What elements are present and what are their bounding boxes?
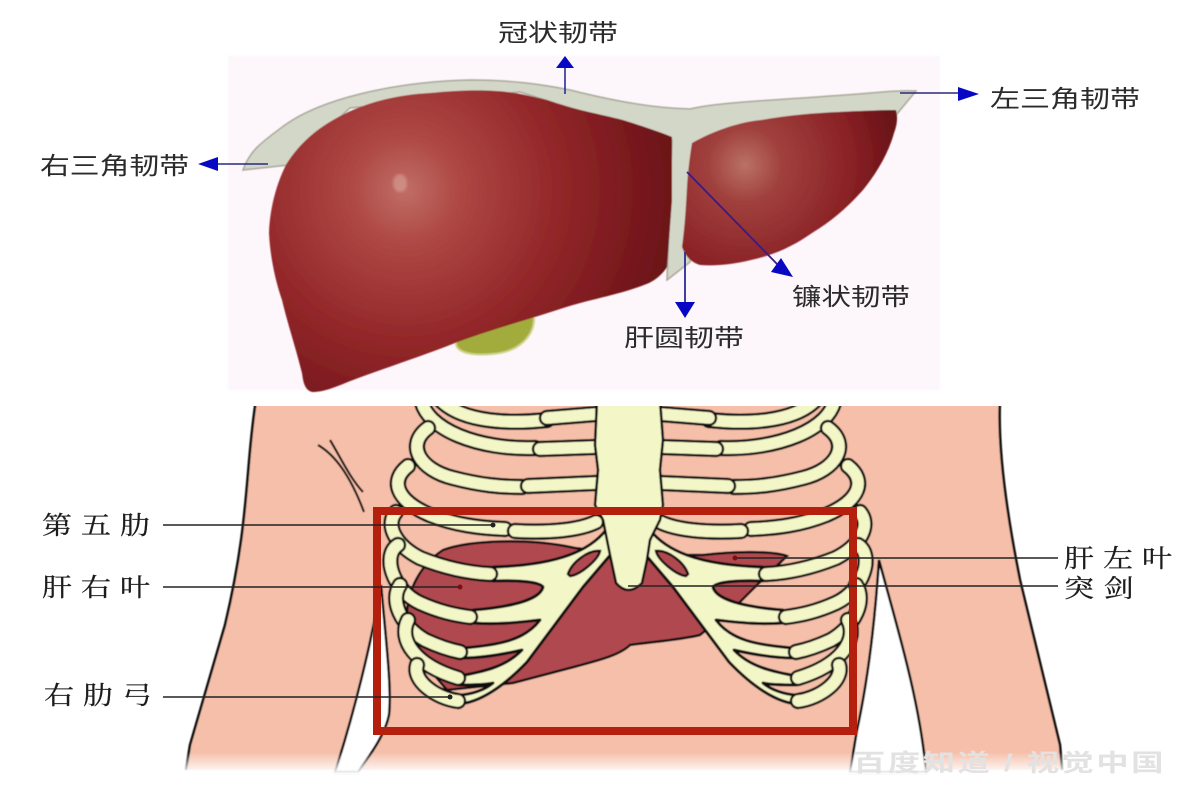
leader: fifth rib — [163, 522, 496, 528]
label: fifth rib: 第五肋 — [42, 511, 150, 539]
arrow: left triangular ligament — [900, 87, 979, 101]
illustration: torso with rib cage — [186, 396, 1062, 772]
arrow: right triangular ligament — [198, 157, 268, 171]
liver highlight — [393, 174, 407, 192]
leader: xiphoid process — [628, 585, 1058, 587]
torso — [186, 400, 1062, 770]
arrow: falciform ligament — [687, 172, 793, 277]
armpit creases — [318, 440, 364, 512]
illustration: liver anterior view — [243, 80, 916, 392]
label: left lobe of liver: 肝左叶 — [1064, 544, 1172, 572]
liver in abdomen — [407, 541, 787, 690]
ligament membrane — [243, 80, 916, 280]
left lobe — [682, 110, 897, 265]
left arm gap — [335, 585, 390, 772]
ribs: body right — [644, 396, 866, 704]
ribs: body left — [390, 396, 612, 704]
right lobe — [269, 90, 672, 392]
sternum and xiphoid — [595, 400, 663, 590]
fade at bottom of torso — [170, 752, 1080, 774]
arrow: coronary ligament — [556, 56, 574, 94]
label: xiphoid process: 突剑 — [1064, 574, 1134, 602]
panel: liver illustration background — [228, 56, 940, 390]
leader: right costal arch — [163, 694, 452, 700]
highlight box — [377, 511, 853, 731]
watermark: 百度知道 / 视觉中国 — [853, 750, 1164, 777]
label: round ligament: 肝圆韧带 — [624, 325, 744, 352]
label: falciform ligament: 镰状韧带 — [792, 284, 910, 311]
label: left triangular ligament: 左三角韧带 — [990, 86, 1140, 113]
right arm gap — [850, 560, 926, 772]
body outline — [186, 400, 1062, 770]
label: right costal arch: 右肋弓 — [44, 681, 152, 709]
gallbladder — [456, 316, 534, 354]
label: coronary ligament: 冠状韧带 — [498, 20, 618, 47]
leader: left lobe of liver — [732, 556, 1058, 560]
label: right triangular ligament: 右三角韧带 — [40, 153, 189, 180]
leader: right lobe of liver — [163, 584, 462, 590]
label: right lobe of liver: 肝右叶 — [42, 573, 150, 601]
arrow: round ligament — [675, 252, 695, 318]
